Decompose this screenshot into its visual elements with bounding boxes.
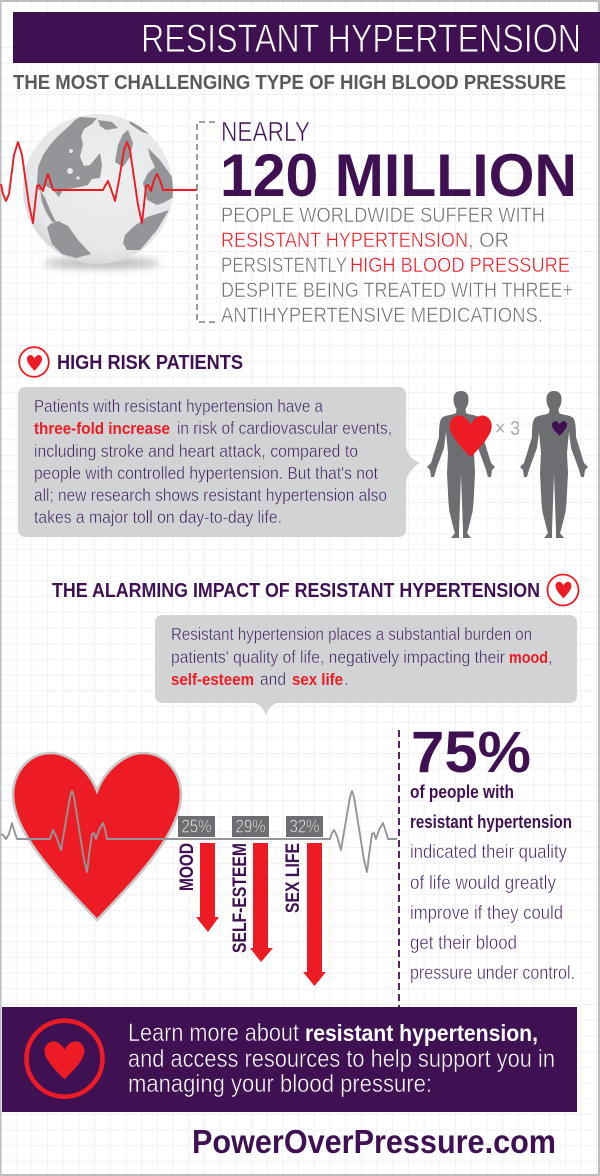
- arrow: sex life: [303, 843, 326, 986]
- figure: body with large heart: [427, 391, 520, 538]
- heading: high risk patients: HIGH RISK PATIENTS: [57, 352, 243, 374]
- stat: 75 percent: of people with: [410, 782, 514, 802]
- times three: × 3: [495, 418, 520, 440]
- panel: quality of life speech bubble: ,: [548, 647, 553, 667]
- stat: self-esteem: 29%: [236, 816, 266, 836]
- footer text: managing your blood pressure:: [128, 1070, 432, 1098]
- panel: quality of life speech bubble: .: [344, 669, 349, 689]
- arrow: self-esteem: [250, 843, 273, 962]
- panel: high risk speech bubble: in risk of cardiovascular events,: [177, 418, 392, 438]
- panel: high risk speech bubble: people with controlled hypertension. But that's not: [34, 463, 378, 483]
- subtitle: THE MOST CHALLENGING TYPE OF HIGH BLOOD PRESSURE: [13, 72, 566, 94]
- stat: 75 percent: 75%: [411, 720, 531, 785]
- icon: footer heart in circle: [26, 1021, 102, 1097]
- panel: high risk speech bubble: Patients with resistant hypertension have a: [34, 396, 323, 416]
- panel: quality of life speech bubble: patients' quality of life, negatively impacting their: [171, 647, 505, 667]
- small purple heart: [552, 421, 567, 436]
- stat: 75 percent: [410, 720, 575, 984]
- stat: sex life: [283, 816, 326, 986]
- figure: body with small heart: [520, 391, 588, 538]
- website url: PowerOverPressure.com: [192, 1123, 556, 1160]
- footer text: [128, 1019, 555, 1098]
- stat: 75 percent: indicated their quality: [410, 841, 567, 863]
- nearly: NEARLY: [221, 116, 310, 147]
- grey pulse line: [1, 791, 397, 872]
- icon: heart in circle, high risk: [19, 347, 49, 377]
- description: PERSISTENTLY: [221, 254, 347, 277]
- panel: high risk speech bubble: [18, 387, 420, 537]
- big number: 120 MILLION: [220, 142, 577, 209]
- heading: alarming impact: THE ALARMING IMPACT OF RESISTANT HYPERTENSION: [52, 580, 540, 602]
- icon: heart in circle, alarming impact: [548, 574, 578, 606]
- stat block: 120 million: [220, 116, 577, 327]
- arrow: mood: [196, 843, 219, 932]
- panel: high risk speech bubble: including stroke and heart attack, compared to: [34, 441, 358, 461]
- footer text: resistant hypertension,: [305, 1020, 538, 1046]
- pulse line: [1, 142, 197, 223]
- dashed bracket: [197, 122, 215, 322]
- stat: self-esteem: [230, 816, 273, 962]
- stat: sex life: SEX LIFE: [283, 843, 304, 913]
- description: PEOPLE WORLDWIDE SUFFER WITH: [221, 204, 545, 227]
- description: , OR: [468, 229, 509, 252]
- stat: 75 percent: resistant hypertension: [410, 812, 572, 832]
- panel: high risk speech bubble: takes a major toll on day-to-day life.: [34, 507, 282, 527]
- panel: high risk speech bubble: three-fold increase: [34, 419, 170, 438]
- description: ANTIHYPERTENSIVE MEDICATIONS.: [221, 304, 543, 327]
- panel: quality of life speech bubble: sex life: [292, 670, 343, 689]
- panel: footer call to action: [2, 1007, 577, 1112]
- large heart with pulse line: [1, 753, 397, 920]
- stat: mood: 25%: [182, 816, 212, 836]
- stat: mood: [177, 816, 219, 932]
- large red heart: [450, 416, 492, 457]
- panel: quality of life speech bubble: mood: [509, 648, 548, 667]
- panel: quality of life speech bubble: and: [260, 669, 286, 689]
- stat: 75 percent: get their blood: [410, 932, 517, 954]
- footer text: Learn more about: [128, 1019, 299, 1047]
- stat: mood: MOOD: [177, 843, 198, 891]
- title banner: [13, 12, 600, 63]
- dashed divider: [398, 730, 400, 1007]
- stat: self-esteem: SELF-ESTEEM: [230, 843, 251, 953]
- panel: quality of life speech bubble: self-esteem: [171, 670, 254, 689]
- panel: high risk speech bubble: all; new research shows resistant hypertension also: [34, 485, 387, 505]
- description: RESISTANT HYPERTENSION: [221, 229, 468, 252]
- description: HIGH BLOOD PRESSURE: [350, 254, 570, 277]
- panel: quality of life speech bubble: [155, 615, 577, 715]
- stat: 75 percent: of life would greatly: [410, 872, 556, 894]
- description: [221, 204, 573, 327]
- stat: sex life: 32%: [290, 816, 320, 836]
- panel: quality of life speech bubble: Resistant hypertension places a substantial burden on: [171, 624, 532, 644]
- stat: 75 percent: improve if they could: [410, 902, 563, 924]
- globe with red pulse line: [1, 114, 197, 269]
